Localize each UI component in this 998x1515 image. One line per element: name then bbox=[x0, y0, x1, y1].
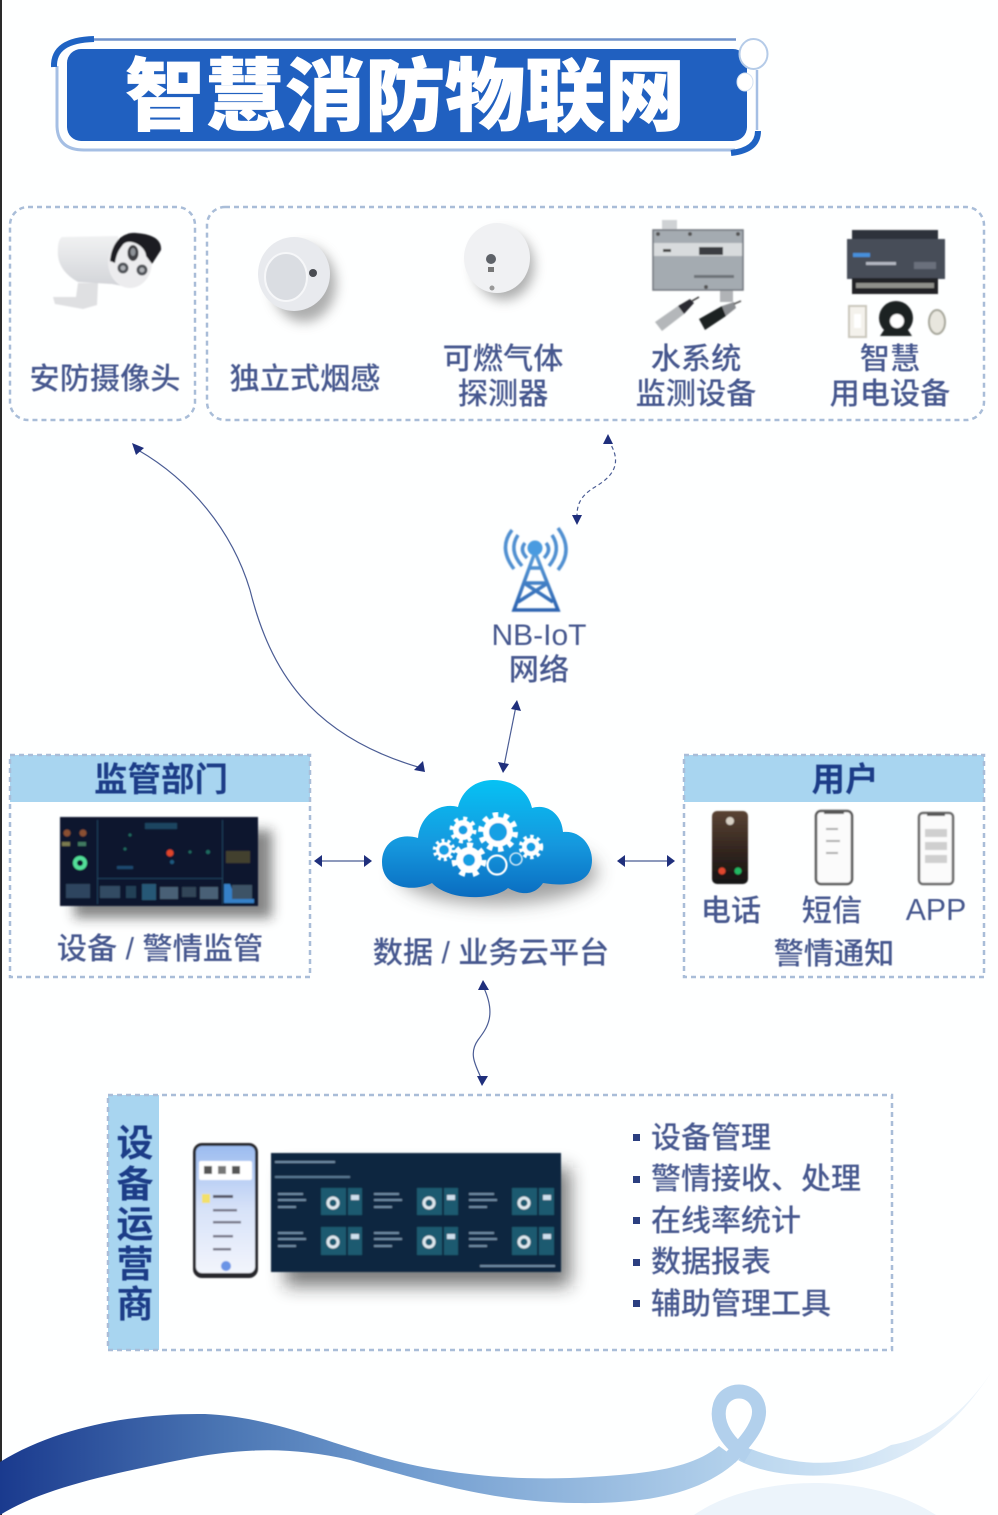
heading: operators (vertical): 营 bbox=[116, 1244, 154, 1285]
label: gas detector: 可燃气体 bbox=[443, 342, 563, 376]
feature list: 在线率统计 bbox=[651, 1205, 801, 1238]
icon: SMS phone bbox=[816, 811, 852, 884]
feature list: 数据报表 bbox=[651, 1246, 771, 1279]
label: smart electrical device: 用电设备 bbox=[830, 377, 950, 411]
icon: NB-IoT tower bbox=[505, 528, 566, 610]
heading: users: 用户 bbox=[812, 762, 878, 799]
icon: water monitoring device bbox=[653, 220, 743, 331]
feature list: 辅助管理工具 bbox=[651, 1288, 831, 1321]
label: gas detector: 探测器 bbox=[458, 377, 548, 411]
feature list bbox=[633, 1122, 861, 1321]
arrow: devices to NB-IoT bbox=[572, 434, 616, 525]
panel: regulators bbox=[10, 755, 310, 977]
arrow: NB-IoT to cloud bbox=[498, 700, 521, 773]
heading: operators (vertical): 设 bbox=[116, 1123, 154, 1164]
icon: camera bbox=[53, 233, 161, 309]
label: APP: APP bbox=[906, 894, 966, 927]
gears bbox=[434, 815, 542, 875]
label: smoke detector: 独立式烟感 bbox=[230, 362, 380, 396]
camera label: 安防摄像头 bbox=[30, 362, 180, 396]
label: alarm notification: 警情通知 bbox=[774, 937, 894, 971]
arrow: camera to cloud bbox=[132, 443, 425, 772]
icon: call phone bbox=[712, 811, 748, 884]
label: monitoring: 设备 / 警情监管 bbox=[57, 932, 263, 966]
panel: security camera bbox=[10, 207, 195, 420]
label: water monitoring device: 水系统 bbox=[651, 342, 741, 376]
title text: 智慧消防物联网 bbox=[125, 52, 685, 141]
heading: operators (vertical): 运 bbox=[116, 1204, 154, 1245]
heading: operators (vertical): 备 bbox=[116, 1164, 154, 1205]
icon: app phone bbox=[919, 813, 953, 884]
arrow: cloud to operators bbox=[473, 980, 490, 1086]
label: NB-IoT network: 网络 bbox=[509, 653, 569, 687]
heading: operators (vertical): 商 bbox=[116, 1284, 154, 1325]
icon: gas detector bbox=[464, 223, 534, 300]
panel: equipment operators bbox=[108, 1095, 892, 1350]
arrow: regulators to cloud bbox=[314, 855, 372, 867]
arrow: users to cloud bbox=[617, 855, 675, 867]
feature list: 警情接收、处理 bbox=[651, 1163, 861, 1196]
title banner bbox=[54, 39, 767, 153]
label: smart electrical device: 智慧 bbox=[860, 342, 920, 376]
label: phone call: 电话 bbox=[701, 894, 761, 928]
operator phone bbox=[193, 1143, 258, 1278]
label: SMS: 短信 bbox=[802, 894, 862, 928]
feature list: 设备管理 bbox=[651, 1122, 771, 1155]
icon: cloud with gears bbox=[382, 780, 597, 904]
icon: smart electrical device bbox=[847, 230, 945, 337]
panel: users bbox=[684, 755, 984, 977]
bottom decorative ribbon bbox=[0, 1370, 993, 1515]
operator dashboard bbox=[271, 1153, 570, 1286]
monitoring screen bbox=[60, 817, 272, 918]
icon: smoke detector bbox=[258, 237, 336, 322]
label: cloud platform: 数据 / 业务云平台 bbox=[373, 936, 609, 970]
panel: sensing devices bbox=[207, 207, 984, 420]
label: water monitoring device: 监测设备 bbox=[636, 377, 756, 411]
heading: regulators: 监管部门 bbox=[94, 762, 228, 799]
label: NB-IoT network: NB-IoT bbox=[491, 619, 587, 652]
